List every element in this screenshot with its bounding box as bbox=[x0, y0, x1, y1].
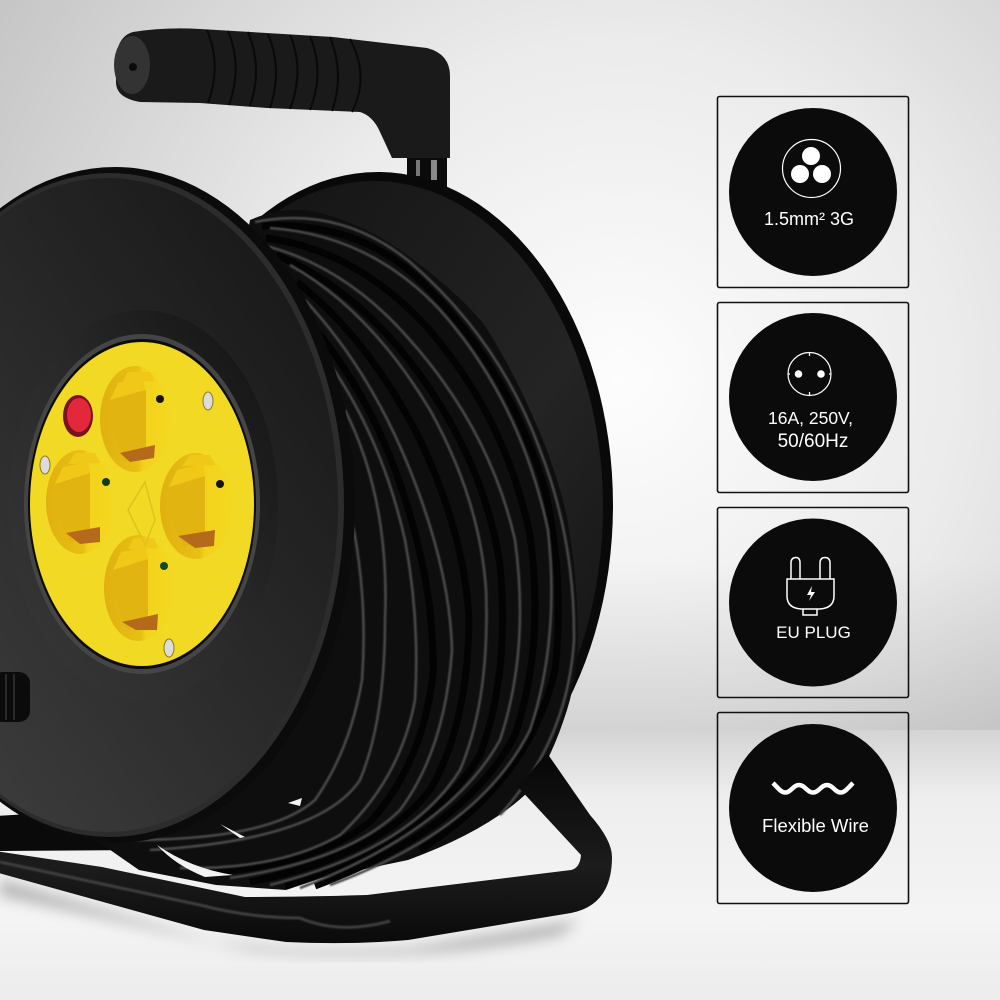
handle stem bbox=[407, 155, 447, 195]
rear stand tube bbox=[0, 812, 140, 851]
front stand tube bbox=[0, 753, 612, 943]
socket plate bbox=[30, 342, 254, 666]
socket: top bbox=[100, 366, 170, 472]
socket: left bbox=[46, 450, 114, 554]
socket: bottom bbox=[104, 535, 172, 641]
centre ring bbox=[8, 310, 278, 700]
feature card: 16A 250V bbox=[718, 302, 908, 492]
feature card: EU plug bbox=[718, 508, 908, 698]
feature card: 1.5mm2 3G bbox=[718, 96, 908, 288]
screws bbox=[40, 392, 213, 657]
icon: wave bbox=[773, 783, 853, 792]
feature card: EU plug: EU PLUG bbox=[776, 623, 851, 642]
feature card: 16A 250V: 16A, 250V, bbox=[768, 408, 853, 428]
feature card: Flexible Wire: Flexible Wire bbox=[762, 815, 869, 836]
icon: three-core cable bbox=[782, 140, 840, 198]
back flange bbox=[143, 172, 613, 838]
side knob bbox=[0, 672, 30, 722]
feature card: Flexible Wire bbox=[718, 712, 908, 904]
wire coil bbox=[86, 210, 578, 890]
product: cable reel photo illustration bbox=[0, 28, 613, 955]
front flange bbox=[0, 167, 355, 843]
icon: plug bbox=[787, 558, 834, 615]
centre logo bbox=[128, 482, 155, 545]
gaps between wires bbox=[157, 798, 302, 877]
indicator light bbox=[63, 395, 93, 437]
icon: EU socket bbox=[788, 352, 831, 396]
feature card: 16A 250V: 50/60Hz bbox=[778, 431, 848, 452]
floor shadow bbox=[0, 880, 580, 955]
feature card: 1.5mm2 3G: 1.5mm² 3G bbox=[764, 209, 854, 229]
socket: right bbox=[160, 453, 232, 559]
handle bbox=[114, 28, 450, 158]
